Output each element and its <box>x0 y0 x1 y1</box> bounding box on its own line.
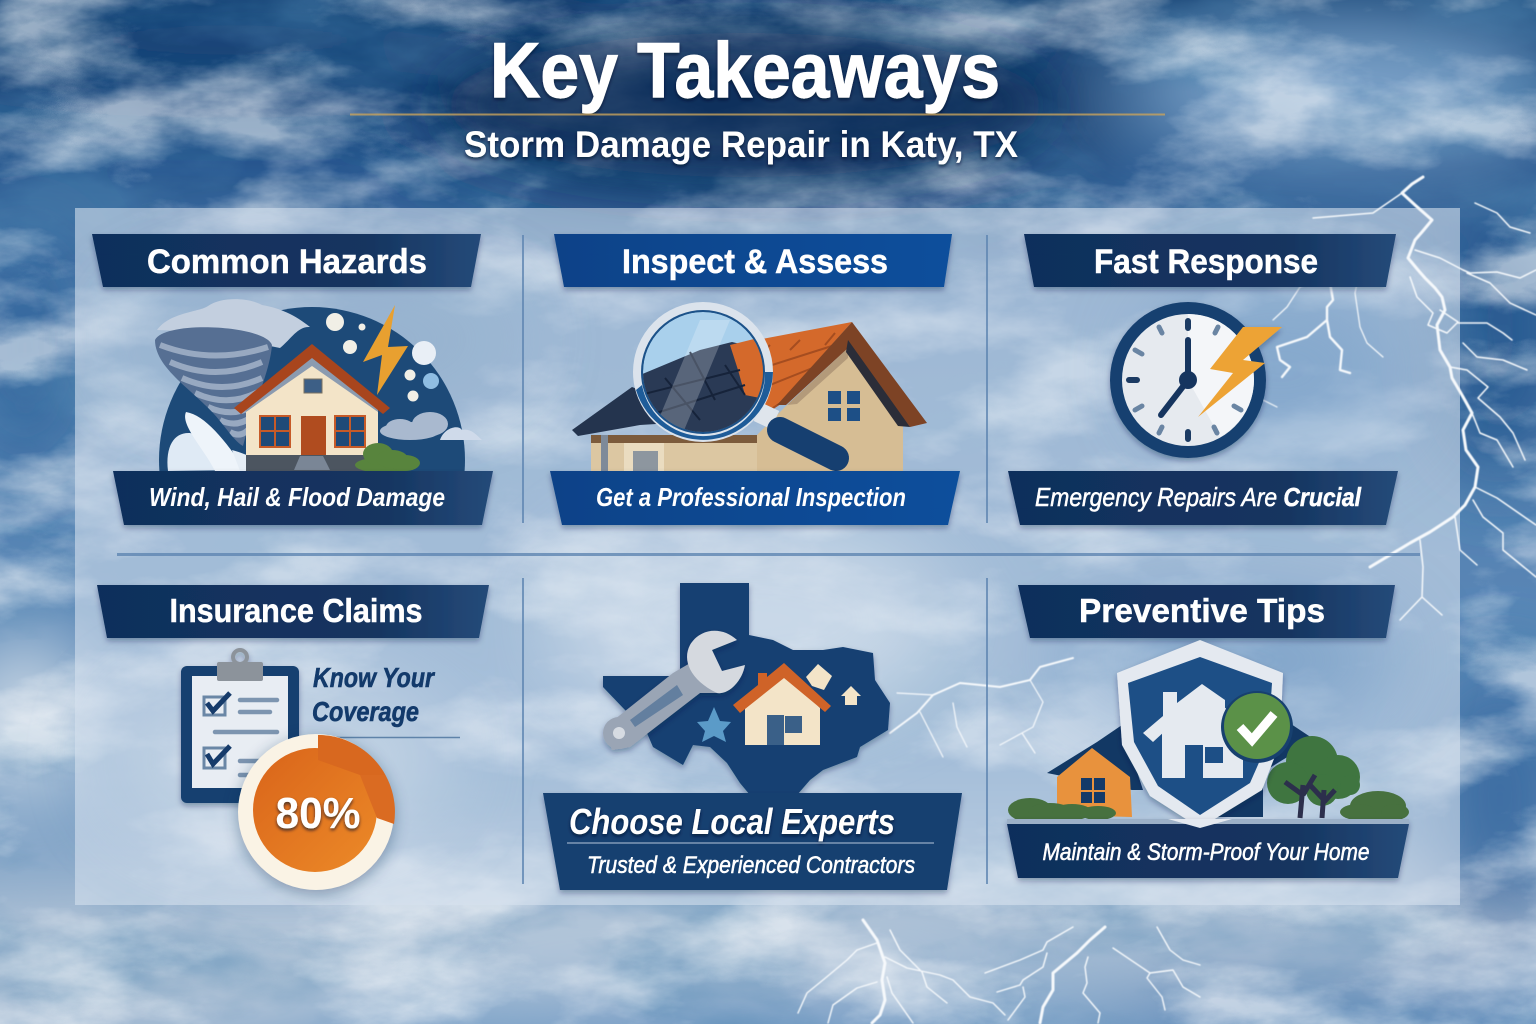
icon: star <box>697 707 731 742</box>
caption banner: Maintain & Storm-Proof Your Home <box>1042 839 1370 866</box>
caption banner <box>1007 819 1409 878</box>
panel: insurance claims <box>97 585 489 894</box>
shield <box>1117 640 1283 828</box>
icon: clipboard checklist <box>181 650 299 803</box>
icon: clock with bolt <box>1110 302 1282 458</box>
clouds right <box>380 412 448 440</box>
title block <box>350 26 1165 177</box>
house <box>246 366 378 455</box>
panel: common hazards <box>90 234 495 532</box>
lightning: bottom strikes <box>798 920 1200 1023</box>
title: Key Takeaways <box>490 26 1000 114</box>
panel: inspect and assess <box>550 234 960 525</box>
chart: 80 percent donut <box>238 734 395 894</box>
heading banner: Preventive Tips <box>1079 592 1325 629</box>
heading banner <box>92 234 481 287</box>
heading banner <box>554 234 952 287</box>
banner: Choose Local Experts <box>569 801 895 842</box>
heading banner <box>1024 234 1396 287</box>
heading banner: Inspect & Assess <box>622 243 888 281</box>
icon: texas map <box>603 583 890 795</box>
subtitle: Storm Damage Repair in Katy, TX <box>464 124 1018 165</box>
magnifier handle <box>758 412 775 420</box>
banner <box>543 793 962 890</box>
caption banner <box>113 471 493 525</box>
panel: fast response <box>1008 234 1398 525</box>
icon: storm house scene <box>155 299 465 471</box>
trees and bushes <box>1008 791 1409 822</box>
caption banner <box>550 471 960 525</box>
heading banner: Common Hazards <box>147 243 427 281</box>
banner: Trusted & Experienced Contractors <box>587 852 915 879</box>
text: know your coverage: Coverage <box>312 696 419 727</box>
chart: 80 percent donut: 80% <box>276 789 360 838</box>
icon: house on map <box>733 663 861 745</box>
caption banner: Get a Professional Inspection <box>596 482 906 512</box>
caption banner: Wind, Hail & Flood Damage <box>149 482 445 512</box>
heading banner <box>97 585 489 638</box>
heading banner: Insurance Claims <box>170 592 422 629</box>
house in shield <box>1162 688 1243 778</box>
cloud overflow and bolt <box>363 305 482 440</box>
panel: translucent card <box>75 208 1460 905</box>
text: know your coverage: Know Your <box>313 662 436 693</box>
icon: protected home scene <box>1008 640 1409 828</box>
icon: wrench <box>603 631 745 750</box>
caption banner <box>1008 471 1398 525</box>
panel: preventive tips <box>1007 585 1409 878</box>
panel: choose local experts <box>543 583 962 890</box>
caption banner: Emergency Repairs Are Crucial <box>1035 482 1362 512</box>
dividers <box>117 235 1420 884</box>
dark roofs behind shield <box>1200 710 1315 817</box>
bush <box>355 443 420 473</box>
magnifier lens <box>633 302 773 442</box>
text: know your coverage <box>300 662 460 738</box>
lightning: right side strikes <box>890 177 1536 757</box>
heading banner: Fast Response <box>1094 243 1318 281</box>
check badge <box>1221 691 1293 763</box>
icon: house and magnifier <box>572 302 927 471</box>
heading banner <box>1018 585 1395 638</box>
hail <box>326 313 439 402</box>
